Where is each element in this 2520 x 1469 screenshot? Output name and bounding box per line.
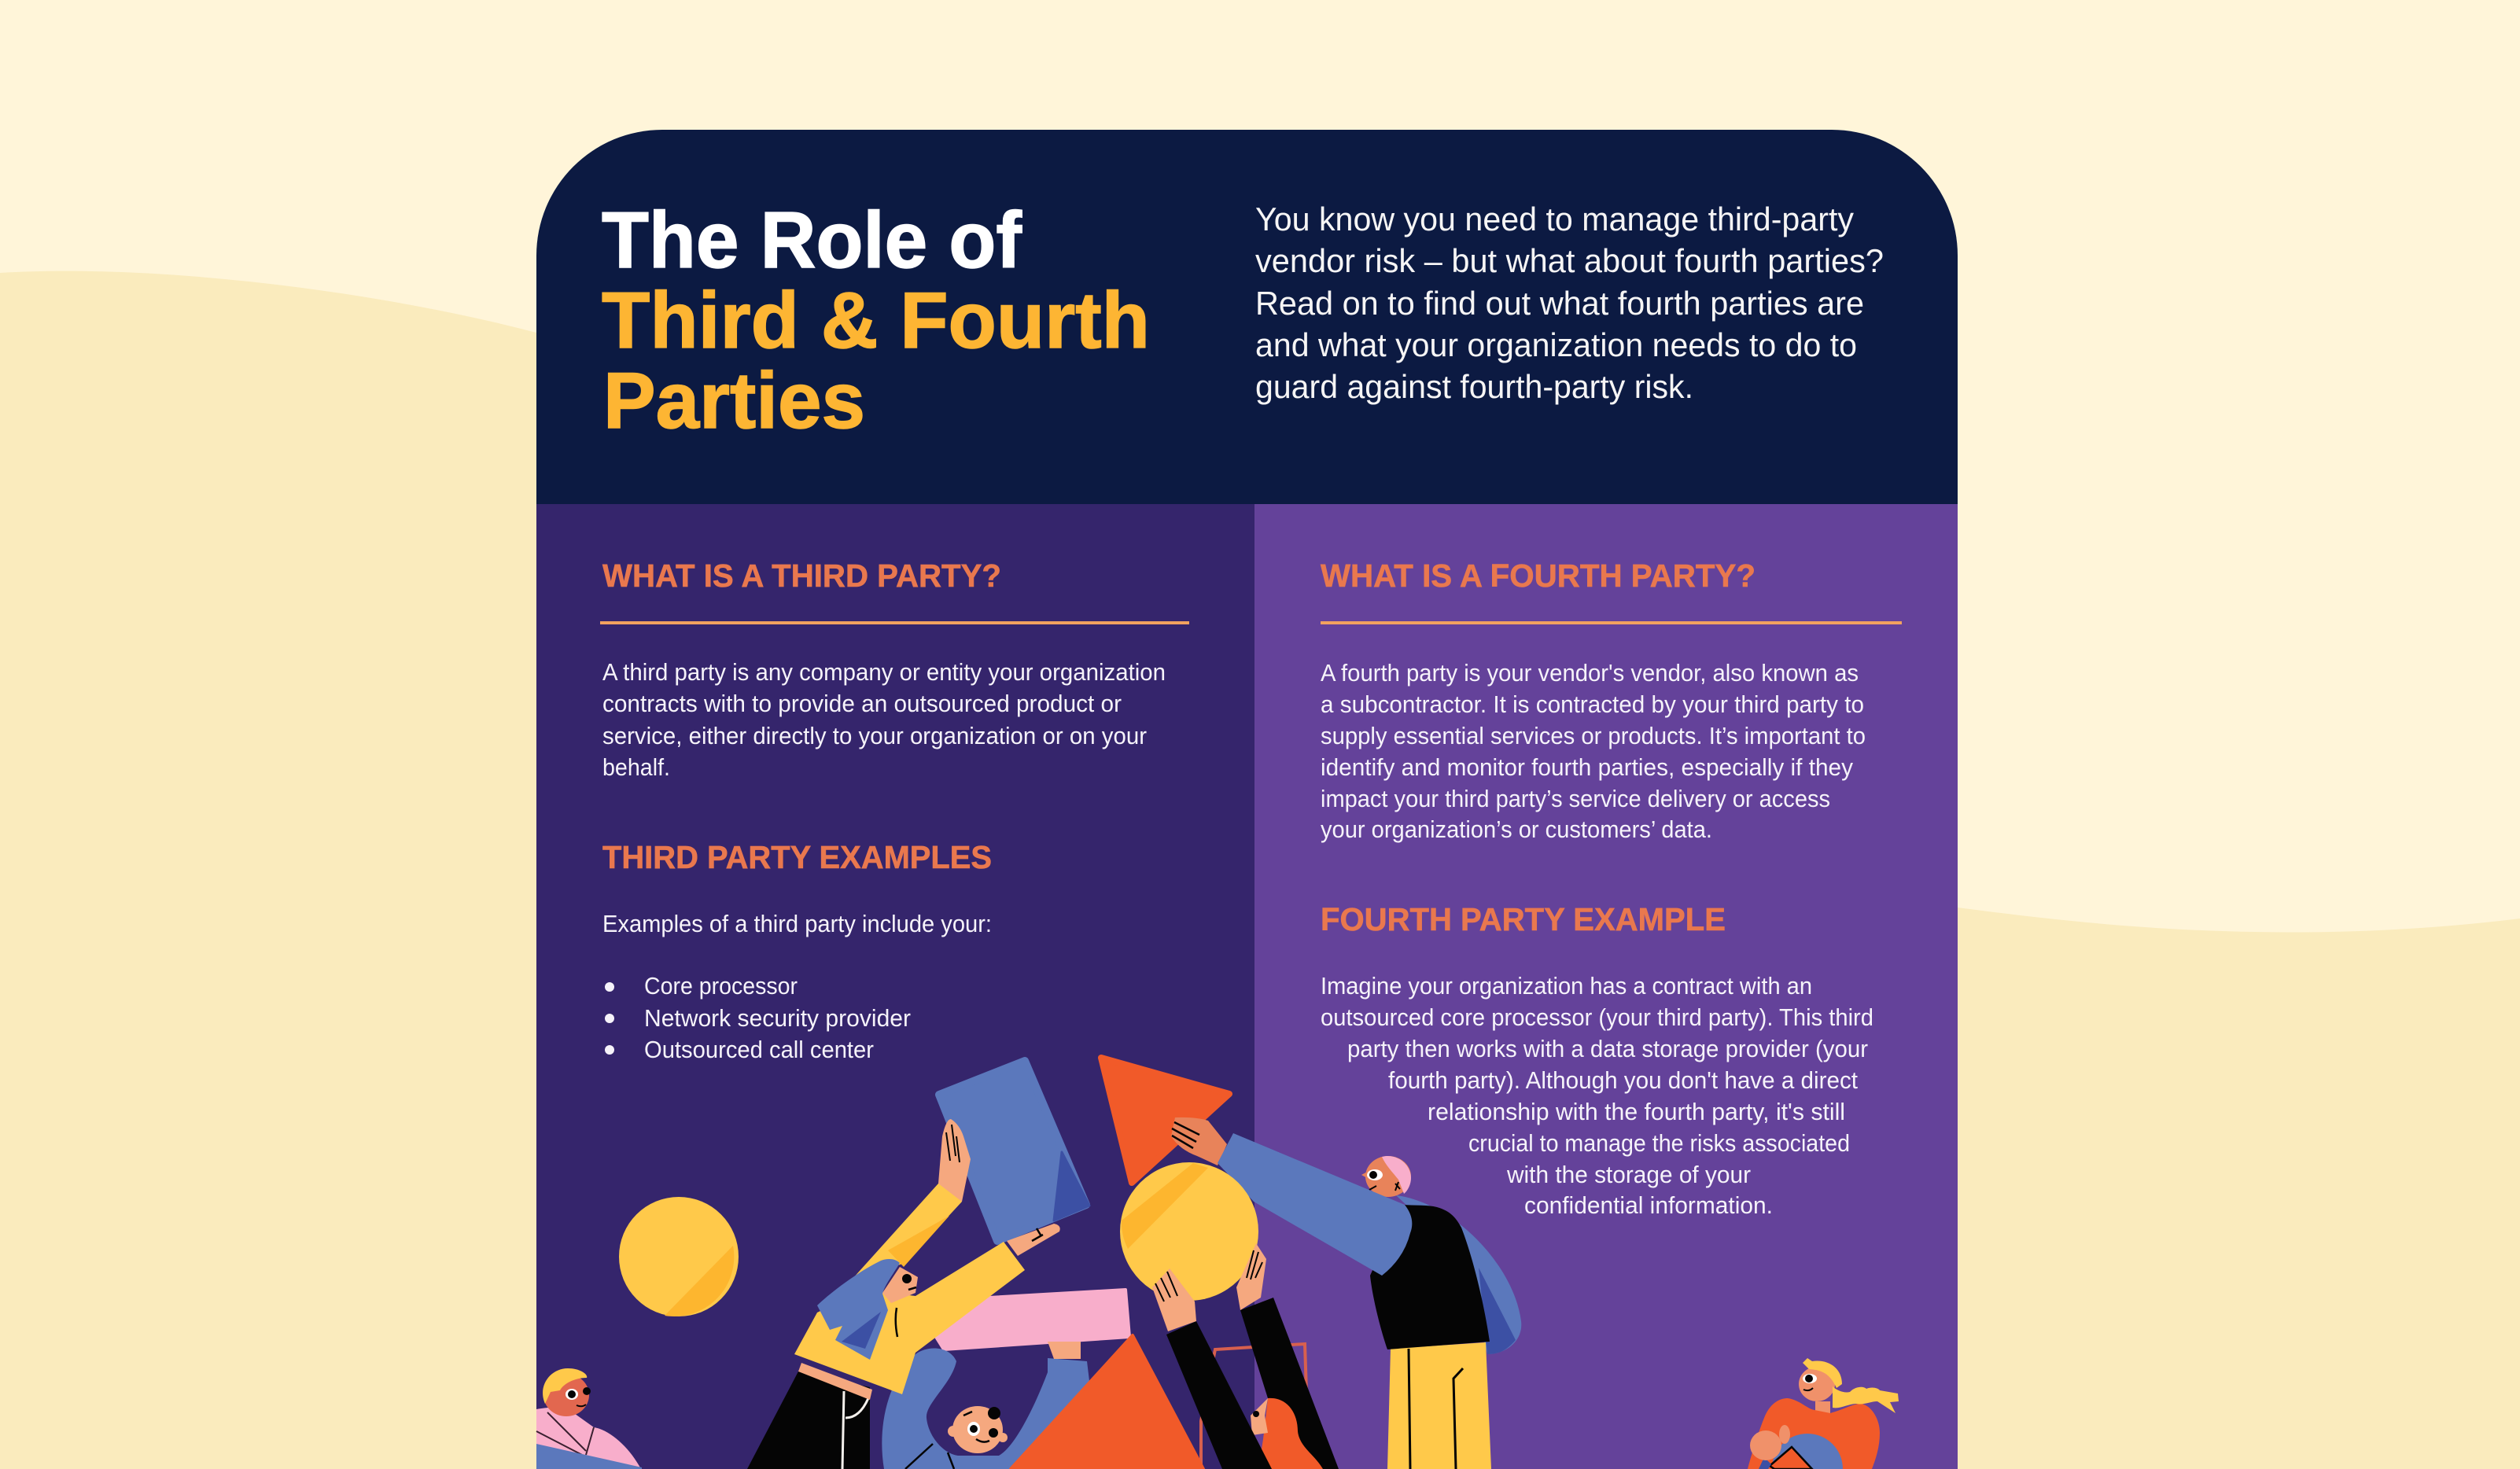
shape: blue rectangle (939, 1061, 1089, 1241)
icon: small yellow circle (619, 1197, 739, 1316)
text: fourth party definition: impact your third party’s service delivery or access (1321, 785, 1830, 812)
text: third party definition: service, either directly to your organization or on your (602, 722, 1147, 749)
panel: header (536, 130, 1958, 504)
intro text: You know you need to manage third-party (1255, 201, 1854, 237)
text: fourth party definition: identify and monitor fourth parties, especially if they (1321, 753, 1853, 781)
text: fourth party definition: supply essential services or products. It’s important to (1321, 722, 1866, 749)
figure: red haired person with raised arms (1152, 1243, 1339, 1469)
heading: what is a fourth party: WHAT IS A FOURTH PARTY? (1321, 558, 1756, 594)
list: third party examples (605, 972, 911, 1063)
text: fourth party example: with the storage of your (1506, 1161, 1751, 1188)
figure: blonde woman holding ball (1748, 1358, 1899, 1469)
text: fourth party example: outsourced core processor (your third party). This third (1321, 1003, 1873, 1031)
intro text (1255, 201, 1884, 405)
title: Parties (603, 357, 865, 445)
intro text: vendor risk – but what about fourth parties? (1255, 242, 1884, 279)
heading: fourth party example: FOURTH PARTY EXAMPLE (1321, 901, 1726, 937)
shape: pink rectangle (936, 1290, 1129, 1349)
heading: what is a third party: WHAT IS A THIRD PARTY? (602, 558, 1001, 594)
text: fourth party example: crucial to manage the risks associated (1468, 1129, 1850, 1157)
list: third party examples: Network security provider (644, 1004, 911, 1032)
text: third party definition: A third party is any company or entity your organization (602, 658, 1166, 686)
figure: woman in yellow sweater (747, 1119, 1060, 1469)
figure: person with bun (882, 1342, 1089, 1469)
text: fourth party definition (1321, 659, 1866, 843)
title (602, 197, 1150, 445)
text: fourth party definition: your organization’s or customers’ data. (1321, 815, 1712, 843)
intro text: and what your organization needs to do to (1255, 326, 1857, 363)
heading: third party examples: THIRD PARTY EXAMPLES (602, 839, 992, 875)
figure: bald person reaching (1171, 1117, 1521, 1469)
text: third party definition: contracts with to provide an outsourced product or (602, 690, 1122, 717)
text: fourth party example: fourth party). Although you don't have a direct (1388, 1066, 1858, 1094)
figure: man at left edge (536, 1368, 642, 1469)
shape: orange triangle top (1101, 1058, 1229, 1183)
text: fourth party example (1321, 972, 1873, 1219)
text: fourth party example: Imagine your organization has a contract with an (1321, 972, 1812, 1000)
text: examples intro: Examples of a third party include your: (602, 910, 992, 937)
panel: fourth party column (1254, 503, 1958, 1469)
title: Third & Fourth (602, 277, 1150, 365)
text: third party definition (602, 658, 1166, 781)
panel: third party column (536, 503, 1254, 1469)
list: third party examples: Core processor (644, 972, 798, 1000)
list: third party examples: Outsourced call center (644, 1036, 874, 1063)
shape: orange triangle bottom (1011, 1335, 1203, 1469)
title: The Role of (602, 197, 1022, 285)
text: fourth party example: relationship with the fourth party, it's still (1428, 1098, 1845, 1125)
text: fourth party example: confidential information. (1524, 1191, 1773, 1219)
text: fourth party definition: a subcontractor. It is contracted by your third party to (1321, 690, 1864, 718)
intro text: guard against fourth-party risk. (1255, 368, 1693, 405)
shape: red outline rectangle (1201, 1344, 1306, 1469)
text: fourth party definition: A fourth party is your vendor's vendor, also known as (1321, 659, 1859, 687)
intro text: Read on to find out what fourth parties are (1255, 285, 1864, 322)
text: fourth party example: party then works with a data storage provider (your (1347, 1035, 1868, 1062)
illustration: team stacking shapes (536, 1058, 1899, 1469)
text: third party definition: behalf. (602, 753, 670, 781)
icon: big yellow circle (1120, 1162, 1258, 1301)
